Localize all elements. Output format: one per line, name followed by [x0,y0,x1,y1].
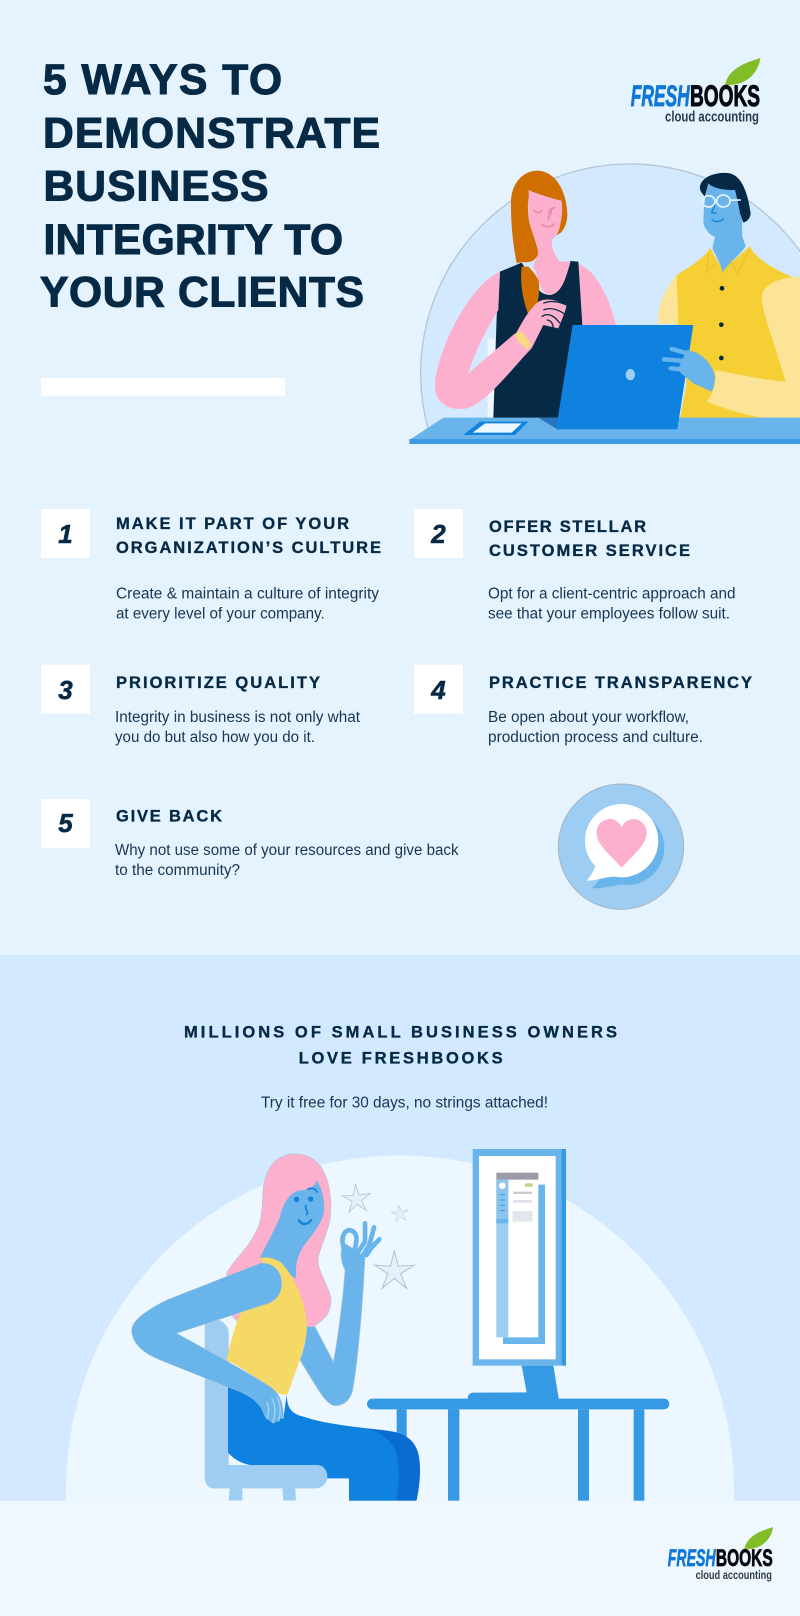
numbered step 3 [41,665,361,746]
stars [341,1183,414,1288]
chair strip [488,338,495,418]
monitor [473,1149,566,1366]
numbered step 4: 4 [430,675,446,705]
tablet on desk [463,422,528,435]
heading: call to action: LOVE FRESHBOOKS [299,1050,503,1068]
watch [515,332,532,349]
chair legs [229,1487,296,1501]
numbered step 3: 3 [58,675,73,705]
logo: FreshBooks top: cloud accounting [665,110,759,126]
yellow top [227,1257,307,1395]
woman [435,171,616,418]
background semicircle [66,1155,734,1501]
desk [409,418,800,444]
title [40,57,380,317]
numbered step 2: see that your employees follow suit. [488,605,730,622]
illustration: woman on chair [132,1154,420,1503]
heading: call to action: MILLIONS OF SMALL BUSINESS OWNERS [184,1024,617,1042]
numbered step 1: MAKE IT PART OF YOUR [116,515,349,533]
panel: top background [0,0,800,955]
title: YOUR CLIENTS [40,270,364,317]
numbered step 5: GIVE BACK [116,808,222,826]
panel: footer background [0,1501,800,1616]
desk [367,1366,669,1503]
numbered step 4: PRACTICE TRANSPARENCY [489,674,752,692]
numbered step 2: CUSTOMER SERVICE [489,542,690,560]
heading: call to action [184,1024,617,1068]
laptop [538,325,693,429]
facial features [294,1188,317,1224]
chair seat [205,1463,327,1488]
numbered step 4 [414,665,752,746]
illustration: two colleagues at a laptop [409,163,800,444]
panel: call to action background [0,955,800,1501]
icon: heart speech bubble [558,784,684,909]
numbered step 3: Integrity in business is not only what [115,709,361,726]
title: INTEGRITY TO [44,217,343,264]
left arm [132,1263,283,1423]
right arm and hand [300,1223,379,1406]
logo: FreshBooks top [631,58,760,126]
logo: FreshBooks top: BOOKS [690,80,760,113]
background circle [420,163,800,428]
man [658,173,800,423]
numbered step 4: production process and culture. [488,729,703,746]
numbered step 5: to the community? [115,862,240,879]
arm [435,272,532,409]
numbered step 4: Be open about your workflow, [488,709,689,726]
title: DEMONSTRATE [43,110,380,157]
face [260,1180,324,1278]
numbered step 3: PRIORITIZE QUALITY [116,674,320,692]
logo: FreshBooks top: FRESH [631,80,690,113]
logo: FreshBooks bottom: FRESH [668,1545,716,1572]
numbered step 2 [414,509,736,622]
jeans [228,1385,420,1503]
knee shading [367,1428,420,1503]
numbered step 1: at every level of your company. [116,605,325,622]
numbered step 1: Create & maintain a culture of integrity [116,585,379,602]
numbered step 5 [41,799,459,879]
text: free trial: Try it free for 30 days, no strings attached! [261,1095,548,1112]
title: 5 WAYS TO [43,57,282,104]
logo: FreshBooks bottom [668,1527,773,1582]
numbered step 2: Opt for a client-centric approach and [488,585,736,602]
man's hand [664,349,715,392]
numbered step 1: 1 [58,519,73,549]
logo: FreshBooks bottom: cloud accounting [696,1569,772,1582]
numbered step 2: 2 [430,519,446,549]
illustration: desk and monitor [367,1149,669,1503]
white title bar [41,378,285,396]
numbered step 2: OFFER STELLAR [489,518,646,536]
numbered step 5: Why not use some of your resources and give back [115,842,459,859]
numbered step 5: 5 [58,808,73,838]
numbered step 3: you do but also how you do it. [115,729,315,746]
title: BUSINESS [44,164,268,211]
numbered step 1 [41,509,381,622]
hair [227,1154,331,1327]
chair back [205,1319,228,1478]
fingers [267,1397,280,1423]
numbered step 1: ORGANIZATION’S CULTURE [116,539,381,557]
